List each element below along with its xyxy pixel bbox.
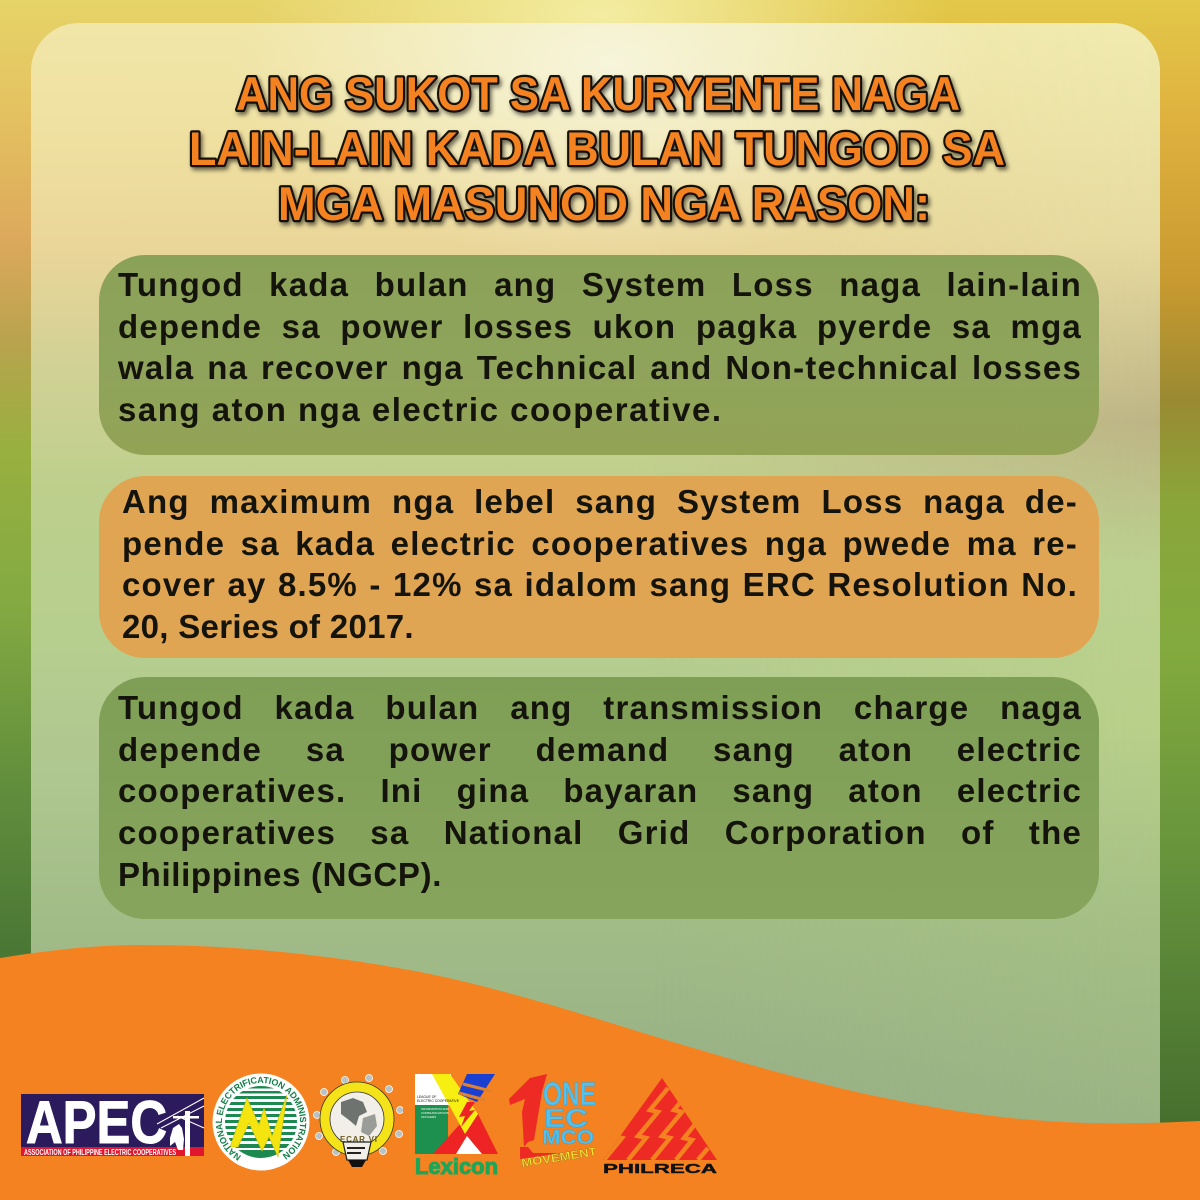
text block: maximum system loss: cover ay 8.5% - 12% sa idalom sang ERC Resolution No.	[122, 566, 1078, 603]
text block: transmission charge: depende sa power demand sang aton electric	[118, 731, 1082, 768]
logo: National Electrification Administration: NATIONAL ELECTRIFICATION ADMINISTRATION	[216, 1076, 306, 1161]
text block: system loss explanation: sang aton nga electric cooperative.	[118, 391, 723, 428]
title: LAIN-LAIN KADA BULAN TUNGOD SA	[189, 122, 1005, 175]
logo: Philreca: PHILRECA	[603, 1161, 718, 1176]
logo: Lexicon: OFFICERS	[421, 1115, 436, 1119]
title: ANG SUKOT SA KURYENTE NAGA	[236, 67, 960, 120]
title: MGA MASUNOD NGA RASON:	[278, 177, 930, 230]
orange wave footer	[0, 945, 1200, 1200]
logo: Philreca	[603, 1078, 718, 1176]
title	[188, 67, 1010, 230]
logo: Lexicon: COMMUNICATIONS	[421, 1111, 449, 1115]
text block: transmission charge: cooperatives sa National Grid Corporation of the	[118, 814, 1082, 851]
logo: One ECMCO Movement: MCO	[542, 1127, 594, 1149]
text block: maximum system loss: 20, Series of 2017.	[122, 608, 414, 645]
text block: system loss explanation	[118, 266, 1082, 428]
logo: One ECMCO Movement	[509, 1074, 598, 1170]
panel: system loss explanation	[99, 255, 1099, 455]
text block: transmission charge: cooperatives. Ini gina bayaran sang aton electric	[118, 772, 1082, 809]
text block: transmission charge	[118, 689, 1082, 893]
text block: system loss explanation: Tungod kada bulan ang System Loss naga lain-lain	[118, 266, 1082, 303]
text block: transmission charge: Tungod kada bulan ang transmission charge naga	[118, 689, 1082, 726]
panel: transmission charge	[99, 677, 1099, 919]
text block: maximum system loss	[122, 483, 1078, 645]
text block: maximum system loss: Ang maximum nga lebel sang System Loss naga de-	[122, 483, 1078, 520]
logo: bulb emblem: ECAR VI	[340, 1135, 377, 1144]
logo: Lexicon: ELECTRIC COOPERATIVE	[417, 1099, 460, 1103]
logo: bulb emblem	[313, 1074, 403, 1167]
text block: system loss explanation: wala na recover nga Technical and Non-technical losses	[118, 349, 1082, 386]
text block: transmission charge: Philippines (NGCP).	[118, 856, 442, 893]
logo: Lexicon	[415, 1074, 498, 1176]
text block: system loss explanation: depende sa power losses ukon pagka pyerde sa mga	[118, 308, 1082, 345]
logo: One ECMCO Movement: EC	[544, 1103, 588, 1133]
logo: Lexicon: LEAGUE OF	[417, 1095, 436, 1099]
panel: maximum system loss	[99, 476, 1099, 658]
logo: One ECMCO Movement: MOVEMENT	[521, 1146, 598, 1170]
text block: maximum system loss: pende sa kada electric cooperatives nga pwede ma re-	[122, 525, 1078, 562]
logo: Lexicon: INFORMATION AND	[421, 1107, 450, 1111]
